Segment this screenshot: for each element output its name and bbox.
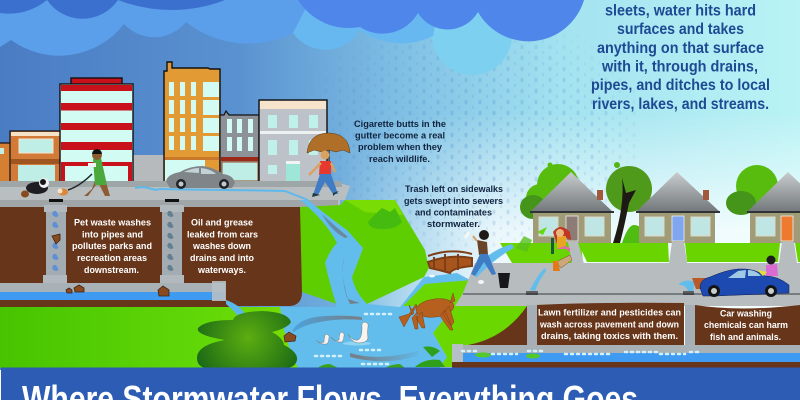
intro text: rivers, lakes, and streams. bbox=[592, 96, 769, 113]
soil boxes under road bbox=[468, 303, 800, 345]
cloud layer: sky blue bbox=[280, 0, 440, 50]
lawn fertilizer text: drains, taking toxics with them. bbox=[541, 330, 678, 341]
oil and grease text bbox=[187, 217, 258, 275]
pet waste text bbox=[72, 217, 152, 275]
gray car bbox=[166, 166, 235, 189]
cigarette butts text: Cigarette butts in the bbox=[354, 118, 446, 129]
right storm pipe bbox=[452, 305, 800, 368]
trash text: gets swept into sewers bbox=[404, 195, 503, 206]
man bbox=[309, 150, 339, 197]
car washing text: chemicals can harm bbox=[704, 319, 788, 330]
building: red striped bbox=[60, 78, 133, 182]
boy littering bbox=[429, 230, 496, 284]
soil wedge bbox=[468, 306, 527, 345]
green hillside bbox=[300, 200, 429, 304]
building: light gray bbox=[259, 100, 327, 182]
car windows bbox=[728, 270, 761, 278]
woman bbox=[766, 256, 778, 276]
pet waste text: recreation areas bbox=[77, 252, 147, 263]
small duck bbox=[331, 332, 344, 342]
pet waste text: pollutes parks and bbox=[72, 240, 152, 251]
intro text: sleets, water hits hard bbox=[605, 2, 756, 20]
cloud layer: dark blue scallops bbox=[0, 0, 225, 19]
road and drains on the right bbox=[455, 263, 800, 306]
vertical pipe right bbox=[160, 199, 184, 290]
intro text: with it, through drains, bbox=[601, 58, 758, 76]
cigarette butts text: reach wildlife. bbox=[369, 153, 430, 164]
bridge bbox=[428, 251, 472, 273]
green field bbox=[0, 307, 300, 368]
cigarette butts text: gutter become a real bbox=[355, 130, 445, 140]
pet waste text: Pet waste washes bbox=[74, 217, 151, 228]
lawn fertilizer text: Lawn fertilizer and pesticides can bbox=[538, 307, 681, 318]
lawn fertilizer text bbox=[538, 307, 681, 341]
lower green banks bbox=[318, 280, 528, 368]
big duck bbox=[343, 322, 371, 346]
soil car box bbox=[695, 305, 800, 345]
cloud layer: mid blue bbox=[0, 0, 310, 56]
car washing text bbox=[704, 308, 788, 342]
leash bbox=[68, 174, 92, 190]
sidewalk and street bbox=[0, 181, 350, 207]
right tree behind house three bbox=[726, 165, 778, 243]
black and white dog bbox=[26, 178, 49, 194]
lawn runoff water bbox=[473, 244, 546, 291]
storm clouds bbox=[0, 0, 584, 75]
building backdrop and far-left shop bbox=[0, 143, 165, 183]
title banner bbox=[1, 368, 800, 400]
trash text bbox=[404, 183, 503, 229]
trash bin bbox=[498, 273, 510, 288]
small duck bbox=[316, 334, 329, 344]
trees bbox=[520, 162, 778, 243]
trash text: and contaminates bbox=[415, 206, 492, 218]
girl with plants bbox=[516, 227, 572, 271]
oil and grease text: drains and into bbox=[190, 252, 254, 263]
storm drain pipes bbox=[0, 199, 226, 301]
oil and grease text: Oil and grease bbox=[191, 217, 253, 228]
cloud layer: pale cyan bbox=[400, 0, 545, 75]
ducks bbox=[316, 322, 371, 346]
wheels bbox=[708, 285, 720, 297]
pollutant on shore bbox=[284, 332, 296, 342]
dog walker bbox=[21, 149, 110, 198]
lawn fertilizer text: wash across pavement and down bbox=[539, 318, 679, 330]
green bush mound bbox=[197, 311, 297, 368]
trash text: Trash left on sidewalks bbox=[405, 183, 503, 194]
car washing text: fish and animals. bbox=[710, 331, 781, 342]
house two bbox=[636, 172, 720, 243]
soil lawn box bbox=[536, 303, 684, 345]
building: orange shop bbox=[10, 131, 61, 183]
lawns and walkways bbox=[500, 242, 800, 264]
rain pattern bbox=[352, 42, 636, 247]
intro text bbox=[591, 2, 770, 113]
vertical pipe left bbox=[43, 199, 67, 290]
pet waste text: into pipes and bbox=[82, 229, 143, 240]
walker bbox=[84, 149, 110, 196]
intro text: anything on that surface bbox=[597, 40, 764, 57]
street drains on right bbox=[526, 281, 695, 295]
small tan dog bbox=[58, 188, 68, 196]
car washing text: Car washing bbox=[720, 308, 772, 318]
building: tall orange brick bbox=[164, 62, 220, 182]
underground soil bbox=[0, 207, 302, 307]
deer bbox=[399, 293, 455, 330]
center tree bbox=[606, 162, 652, 243]
house one bbox=[530, 172, 614, 243]
pet waste in pipes bbox=[52, 234, 169, 296]
oil and grease text: waterways. bbox=[197, 264, 246, 275]
cloud layer: big right cloud bbox=[298, 0, 584, 41]
man with umbrella bbox=[307, 133, 350, 197]
trash text: stormwater. bbox=[427, 218, 480, 229]
blue car with woman washing bbox=[692, 256, 789, 297]
pond and stream bbox=[226, 200, 470, 368]
building: gray middle bbox=[220, 111, 259, 182]
bucket bbox=[692, 278, 708, 289]
car body bbox=[700, 269, 789, 296]
house three bbox=[747, 172, 800, 243]
sponge bbox=[757, 270, 767, 276]
oil and grease text: washes down bbox=[192, 240, 251, 251]
cigarette butts text bbox=[354, 118, 446, 164]
umbrella bbox=[307, 133, 350, 153]
horizontal pipe with water bbox=[0, 281, 226, 301]
oil and grease text: leaked from cars bbox=[187, 229, 258, 240]
pet waste text: downstream. bbox=[84, 264, 139, 275]
dog poop bbox=[21, 190, 29, 198]
cigarette butts text: problem when they bbox=[358, 141, 443, 152]
intro text: surfaces and takes bbox=[617, 21, 744, 38]
intro text: pipes, and ditches to local bbox=[591, 77, 770, 94]
left tree behind house one bbox=[520, 162, 579, 219]
